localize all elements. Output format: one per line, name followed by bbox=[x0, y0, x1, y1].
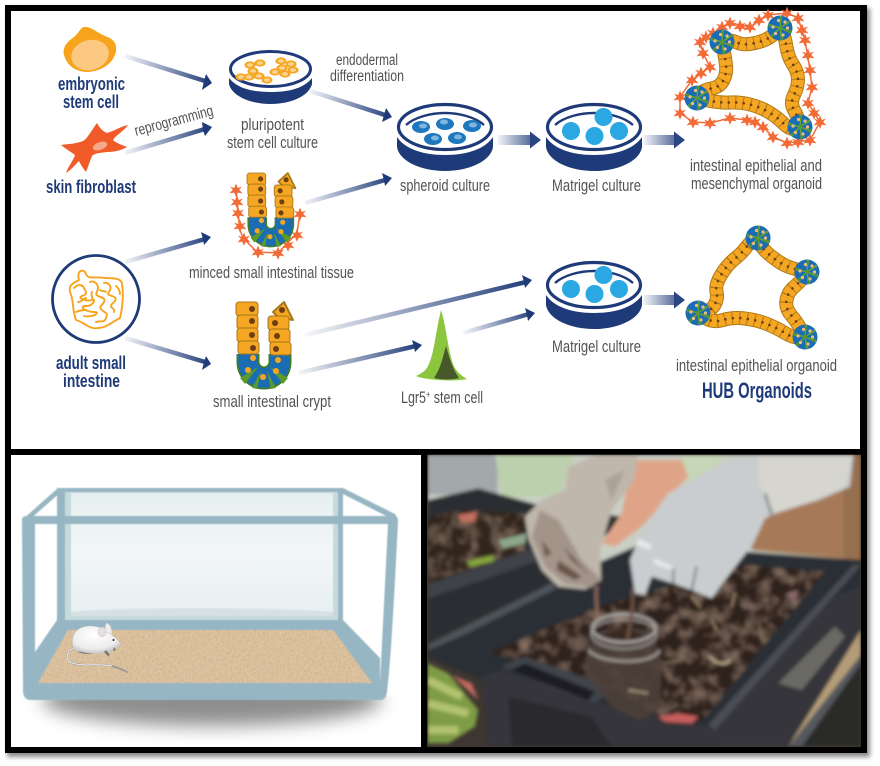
icon: adult small intestine bbox=[52, 256, 140, 342]
icon: intestinal epithelial and mesenchymal organoid bbox=[674, 6, 826, 150]
panel: mouse in glass tank bbox=[5, 449, 427, 753]
icon: intestinal epithelial organoid bbox=[686, 226, 820, 350]
label: endodermal differentiation: differentiation bbox=[330, 68, 404, 85]
label: Matrigel culture, lower: Matrigel culture bbox=[552, 337, 641, 356]
heading: embryonic stem cell: stem cell bbox=[63, 92, 119, 112]
back compost bin bbox=[428, 488, 622, 642]
heading: adult small intestine: adult small bbox=[56, 353, 126, 373]
arrow: crypt to Lgr5 stem cell bbox=[298, 340, 422, 373]
arrow: embryonic stem cell to pluripotent culture bbox=[125, 56, 212, 90]
label: pluripotent stem cell culture: stem cell culture bbox=[227, 133, 318, 152]
icon: Matrigel culture dish, upper bbox=[546, 104, 642, 171]
arrow: spheroid culture to Matrigel culture bbox=[497, 132, 541, 148]
label: minced small intestinal tissue: minced small intestinal tissue bbox=[189, 263, 354, 282]
arrow: minced tissue to spheroid culture bbox=[305, 173, 392, 203]
icon: skin fibroblast bbox=[61, 123, 128, 173]
glass tank bbox=[22, 488, 398, 700]
label: endodermal differentiation: endodermal bbox=[336, 52, 398, 69]
label: intestinal epithelial and mesenchymal organoid: intestinal epithelial and bbox=[690, 156, 822, 175]
icon: embryonic stem cell bbox=[64, 27, 116, 74]
arrow: Matrigel culture to epithelial organoid bbox=[643, 292, 685, 308]
label: Lgr5+ stem cell: + bbox=[426, 390, 430, 401]
arrow: crypt to Matrigel culture bbox=[305, 275, 532, 335]
arrow: adult intestine to crypt bbox=[125, 338, 211, 370]
label: Lgr5+ stem cell: stem cell bbox=[430, 388, 483, 407]
right glove bbox=[630, 455, 853, 598]
glass jar with soil bbox=[585, 614, 662, 720]
label: endodermal differentiation bbox=[330, 52, 404, 85]
panel: hands handling worms in compost bin photo bbox=[421, 449, 867, 753]
icon: pluripotent stem cell dish bbox=[229, 52, 312, 104]
icon: white mouse bbox=[67, 623, 127, 672]
arrow: Matrigel culture to mesenchymal organoid bbox=[643, 132, 685, 148]
arrow: adult intestine to minced tissue bbox=[125, 232, 211, 262]
heading: embryonic stem cell: embryonic bbox=[58, 74, 125, 94]
icon: Lgr5 stem cell bbox=[416, 310, 467, 380]
label: small intestinal crypt: small intestinal crypt bbox=[213, 392, 331, 411]
label: Matrigel culture, upper: Matrigel culture bbox=[552, 176, 641, 195]
icon: Matrigel culture dish, lower bbox=[546, 262, 642, 329]
worms and soil debris bbox=[596, 587, 798, 723]
heading: skin fibroblast: skin fibroblast bbox=[46, 177, 136, 197]
pink arm bbox=[602, 460, 688, 547]
photo background: blurred garden and wood bbox=[428, 455, 861, 747]
front compost bin bbox=[428, 545, 861, 747]
heading: adult small intestine bbox=[56, 353, 126, 391]
label: intestinal epithelial and mesenchymal organoid: mesenchymal organoid bbox=[691, 174, 822, 193]
heading: adult small intestine: intestine bbox=[63, 371, 120, 391]
label: pluripotent stem cell culture: pluripotent bbox=[241, 115, 304, 134]
label: Lgr5+ stem cell: Lgr5 bbox=[401, 388, 435, 407]
arrow: pluripotent culture to spheroid culture bbox=[310, 91, 392, 122]
icon: spheroid culture dish bbox=[397, 104, 493, 171]
heading: HUB Organoids: HUB Organoids bbox=[702, 378, 812, 403]
arrow: skin fibroblast to pluripotent culture bbox=[125, 122, 212, 153]
arrow: Lgr5 stem cell to Matrigel culture bbox=[463, 308, 535, 333]
heading: embryonic stem cell bbox=[58, 74, 125, 112]
panel: organoid culture diagram bbox=[5, 5, 867, 455]
label: reprogramming: reprogramming bbox=[133, 102, 215, 140]
icon: minced small intestinal tissue bbox=[230, 173, 306, 260]
icon: small intestinal crypt bbox=[236, 302, 293, 389]
watermelon rind bbox=[428, 663, 478, 743]
label: intestinal epithelial and mesenchymal organoid bbox=[690, 156, 822, 193]
label: spheroid culture: spheroid culture bbox=[400, 176, 490, 195]
label: pluripotent stem cell culture bbox=[227, 115, 318, 152]
tank drop shadow bbox=[34, 696, 390, 738]
left glove bbox=[525, 455, 638, 589]
label: intestinal epithelial organoid: intestinal epithelial organoid bbox=[676, 356, 837, 375]
